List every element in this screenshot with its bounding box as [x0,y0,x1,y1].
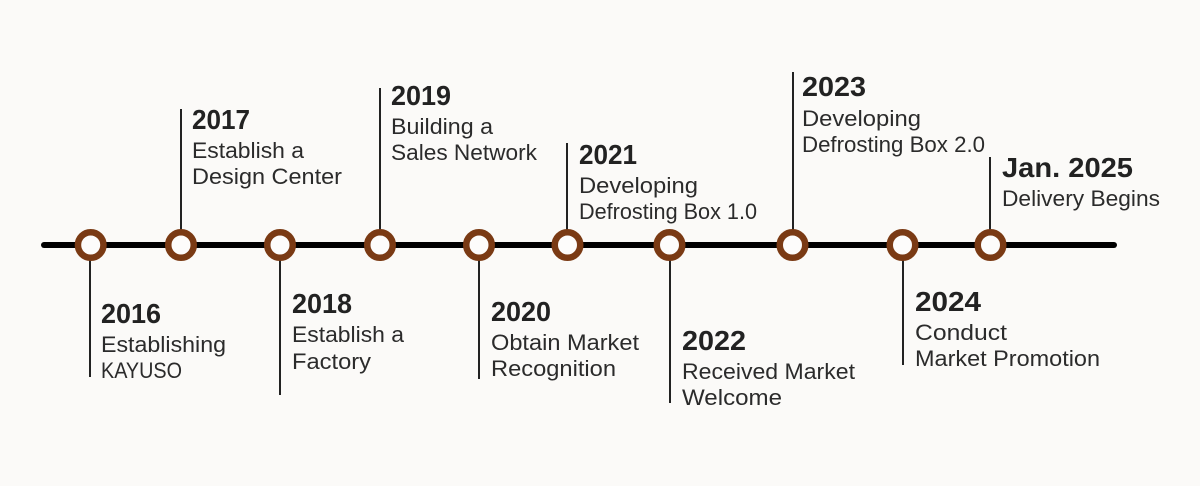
milestone: 2022 [682,325,855,410]
milestone: 2016 [101,298,226,383]
milestone: 2024 [915,286,1100,371]
connector lines [90,72,990,403]
milestone: 2018: Establish a [292,322,405,347]
milestone: 2019 [391,80,538,165]
milestone: 2016: KAYUSO [101,358,182,383]
milestone: 2022: Welcome [682,385,782,410]
milestone: 2018: Factory [292,349,371,374]
milestone: 2017 [192,104,342,189]
milestone: 2020: Recognition [491,356,616,381]
main timeline axis [44,242,1114,248]
milestone: 2018 [292,288,405,374]
milestone: 2019: 2019 [391,80,451,111]
milestone: 2016: 2016 [101,298,161,329]
milestone: 2022: 2022 [682,325,746,356]
milestone: 2019: Sales Network [391,140,538,165]
milestone: 2024: 2024 [915,286,981,317]
milestone: 2020: 2020 [491,296,551,327]
milestone: 2021: Defrosting Box 1.0 [579,199,757,224]
milestone: Jan. 2025: Jan. 2025 [1002,152,1133,183]
milestone: Jan. 2025 [1002,152,1160,211]
milestone: 2018: 2018 [292,288,352,319]
milestone: 2016: Establishing [101,332,226,357]
milestone: 2024: Market Promotion [915,346,1100,371]
timeline nodes [78,232,1003,258]
milestone: 2020: Obtain Market [491,330,639,355]
milestone: 2021: 2021 [579,139,637,170]
milestone: 2017: Establish a [192,138,305,163]
milestone: 2023: 2023 [802,71,866,102]
milestone: 2022: Received Market [682,359,855,384]
milestone: 2023: Defrosting Box 2.0 [802,132,985,157]
milestone: 2023: Developing [802,106,921,131]
milestone: 2017: 2017 [192,104,250,135]
milestone: 2021: Developing [579,173,698,198]
milestone: 2017: Design Center [192,164,342,189]
milestone: 2020 [491,296,639,381]
milestone: 2019: Building a [391,114,494,139]
milestone: 2023 [802,71,985,157]
milestone: 2021 [579,139,757,224]
milestone: 2024: Conduct [915,320,1007,345]
milestone: Jan. 2025: Delivery Begins [1002,186,1160,211]
